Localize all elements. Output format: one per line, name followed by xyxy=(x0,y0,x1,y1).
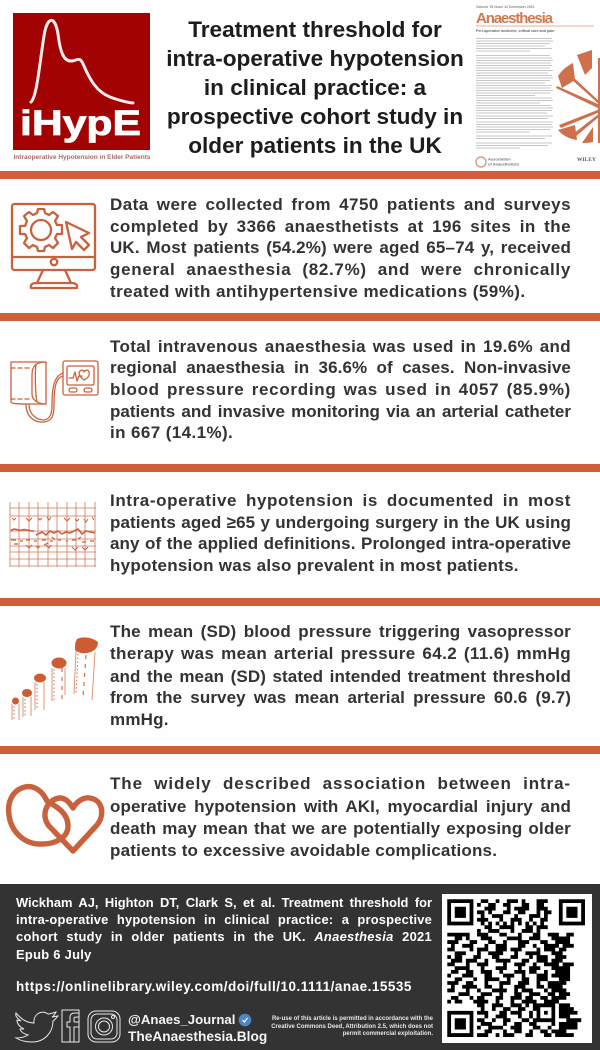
text: death may mean that we are potentially exposing older xyxy=(110,819,571,838)
cover masthead: Anaesthesia xyxy=(476,10,554,27)
blog: TheAnaesthesia.Blog xyxy=(128,1029,267,1044)
citation: https://onlinelibrary.wiley.com/doi/full/10.1111/anae.15535 xyxy=(16,979,412,994)
title: older patients in the UK xyxy=(188,133,442,158)
text: The widely described association between intra- xyxy=(110,774,571,793)
text: and the mean (SD) stated intended treatment threshold xyxy=(110,667,571,686)
journal cover: Association xyxy=(488,156,511,162)
journal cover: of Anaesthetists xyxy=(488,162,520,166)
icon: linked hearts xyxy=(6,784,104,854)
journal cover: Peri-operative medicine, critical care and pain xyxy=(476,29,554,33)
text: data collection xyxy=(110,195,571,301)
text: from the survey was mean arterial pressure 60.6 (9.7) xyxy=(110,688,571,707)
text: patients and invasive monitoring via an arterial catheter xyxy=(110,402,571,421)
licence note xyxy=(271,1016,433,1037)
icon: anaesthetic chart xyxy=(10,502,96,567)
text: patients to excessive avoidable complications. xyxy=(110,841,497,860)
text: therapy was mean arterial pressure 64.2 (11.6) mmHg xyxy=(110,644,571,663)
text: complications xyxy=(110,774,571,860)
text: treated with antihypertensive medications (59%). xyxy=(110,282,526,301)
text: blood pressure recording was used in 4057 (85.9%) xyxy=(110,380,571,399)
icon: blood pressure monitor xyxy=(10,360,99,423)
logo: iHypE: Intraoperative Hypotension in Elder Patients xyxy=(14,155,151,161)
QR code xyxy=(442,894,592,1043)
text: operative hypotension with AKI, myocardial injury and xyxy=(110,797,571,816)
social handle: @Anaes_Journal xyxy=(128,1012,235,1027)
title: in clinical practice: a xyxy=(204,75,426,100)
text: completed by 3366 anaesthetists at 196 sites in the xyxy=(110,217,571,236)
panel: footer xyxy=(0,884,600,1050)
text: UK. Most patients (54.2%) were aged 65–74 y, received xyxy=(110,238,571,257)
citation: cohort study in older patients in the UK. Anaesthesia 2021 xyxy=(16,929,432,944)
icon: instagram xyxy=(88,1010,120,1042)
title: prospective cohort study in xyxy=(167,104,463,129)
text: hypotension was also prevalent in most patients. xyxy=(110,556,519,575)
text: vasopressor thresholds xyxy=(110,622,571,729)
text: in 667 (14.1%). xyxy=(110,423,233,442)
citation: intra-operative hypotension in clinical practice: a prospective xyxy=(16,912,432,927)
text: mmHg. xyxy=(110,710,169,729)
text: The mean (SD) blood pressure triggering vasopressor xyxy=(110,622,571,641)
text: Total intravenous anaesthesia was used in 19.6% and xyxy=(110,337,571,356)
icon: computer with gear and cursor xyxy=(10,202,96,290)
citation: Wickham AJ, Highton DT, Clark S, et al. Treatment threshold for xyxy=(16,895,432,910)
verified badge xyxy=(238,1014,252,1026)
title: intra-operative hypotension xyxy=(166,46,464,71)
journal cover: WILEY xyxy=(577,157,596,163)
licence note: Re-use of this article is permitted in accordance with the xyxy=(272,1016,433,1022)
icon: twitter xyxy=(14,1011,60,1042)
cover petals xyxy=(556,50,600,143)
icon: vasopressor syringes xyxy=(12,637,98,720)
journal cover xyxy=(475,5,600,168)
text: any of the applied definitions. Prolonged intra-operative xyxy=(110,534,571,553)
icon: facebook xyxy=(62,1010,80,1042)
title xyxy=(166,17,464,158)
logo: iHypE xyxy=(13,13,151,161)
citation xyxy=(16,895,432,994)
licence note: permit commercial exploitation. xyxy=(343,1031,433,1037)
text: patients aged ≥65 y undergoing surgery in the UK using xyxy=(110,513,571,532)
text: Data were collected from 4750 patients and surveys xyxy=(110,195,571,214)
text: hypotension findings xyxy=(110,491,571,575)
cover association logo xyxy=(476,157,486,167)
logo: iHypE: iHypE xyxy=(20,104,141,143)
journal cover: Volume 76 Issue 12 December 2021 xyxy=(476,5,535,9)
text: regional anaesthesia in 36.6% of cases. Non-invasive xyxy=(110,358,571,377)
citation: Epub 6 July xyxy=(16,947,92,962)
text: Intra-operative hypotension is documented in most xyxy=(110,491,571,510)
text: anaesthesia and monitoring xyxy=(110,337,571,442)
text: general anaesthesia (82.7%) and were chronically xyxy=(110,260,571,279)
title: Treatment threshold for xyxy=(188,17,442,42)
licence note: Creative Commons Deed, Attribution 2.5, which does not xyxy=(271,1024,433,1030)
